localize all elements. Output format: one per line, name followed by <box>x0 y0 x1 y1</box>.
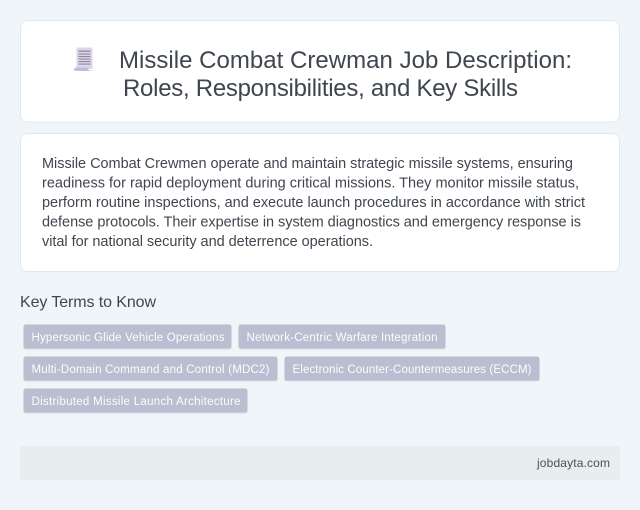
panel: title card <box>20 20 620 122</box>
tag: network-centric <box>238 324 446 349</box>
tag: network-centric: Network-Centric Warfare Integration <box>246 332 438 344</box>
description text: defense protocols. Their expertise in system diagnostics and emergency response is <box>42 214 581 230</box>
tags: key terms <box>24 324 540 413</box>
tag: ECCM <box>284 356 540 381</box>
description text: readiness for rapid deployment during critical missions. They monitor missile status, <box>42 176 579 192</box>
footer text: jobdayta.com <box>536 456 610 470</box>
tag: multi-domain <box>24 356 278 381</box>
tag: hypersonic: Hypersonic Glide Vehicle Operations <box>32 332 225 344</box>
tag: distributed <box>24 388 248 413</box>
footer bar <box>20 446 620 480</box>
panel: description <box>20 134 620 272</box>
tag: hypersonic <box>24 324 232 349</box>
tag: distributed: Distributed Missile Launch Architecture <box>32 396 240 408</box>
tag: ECCM: Electronic Counter-Countermeasures (ECCM) <box>292 364 532 376</box>
heading: key terms: Key Terms to Know <box>20 294 156 311</box>
description text <box>42 156 585 250</box>
description text: perform routine inspections, and execute launch procedures in accordance with strict <box>42 195 585 211</box>
title: Missile Combat Crewman Job Description: <box>119 47 572 74</box>
description text: vital for national security and deterrence operations. <box>42 234 373 250</box>
title <box>119 47 572 102</box>
tag: multi-domain: Multi-Domain Command and Control (MDC2) <box>32 364 270 376</box>
description text: Missile Combat Crewmen operate and maintain strategic missile systems, ensuring <box>42 156 573 172</box>
title: Roles, Responsibilities, and Key Skills <box>123 75 518 102</box>
icon: document scroll <box>74 48 92 71</box>
